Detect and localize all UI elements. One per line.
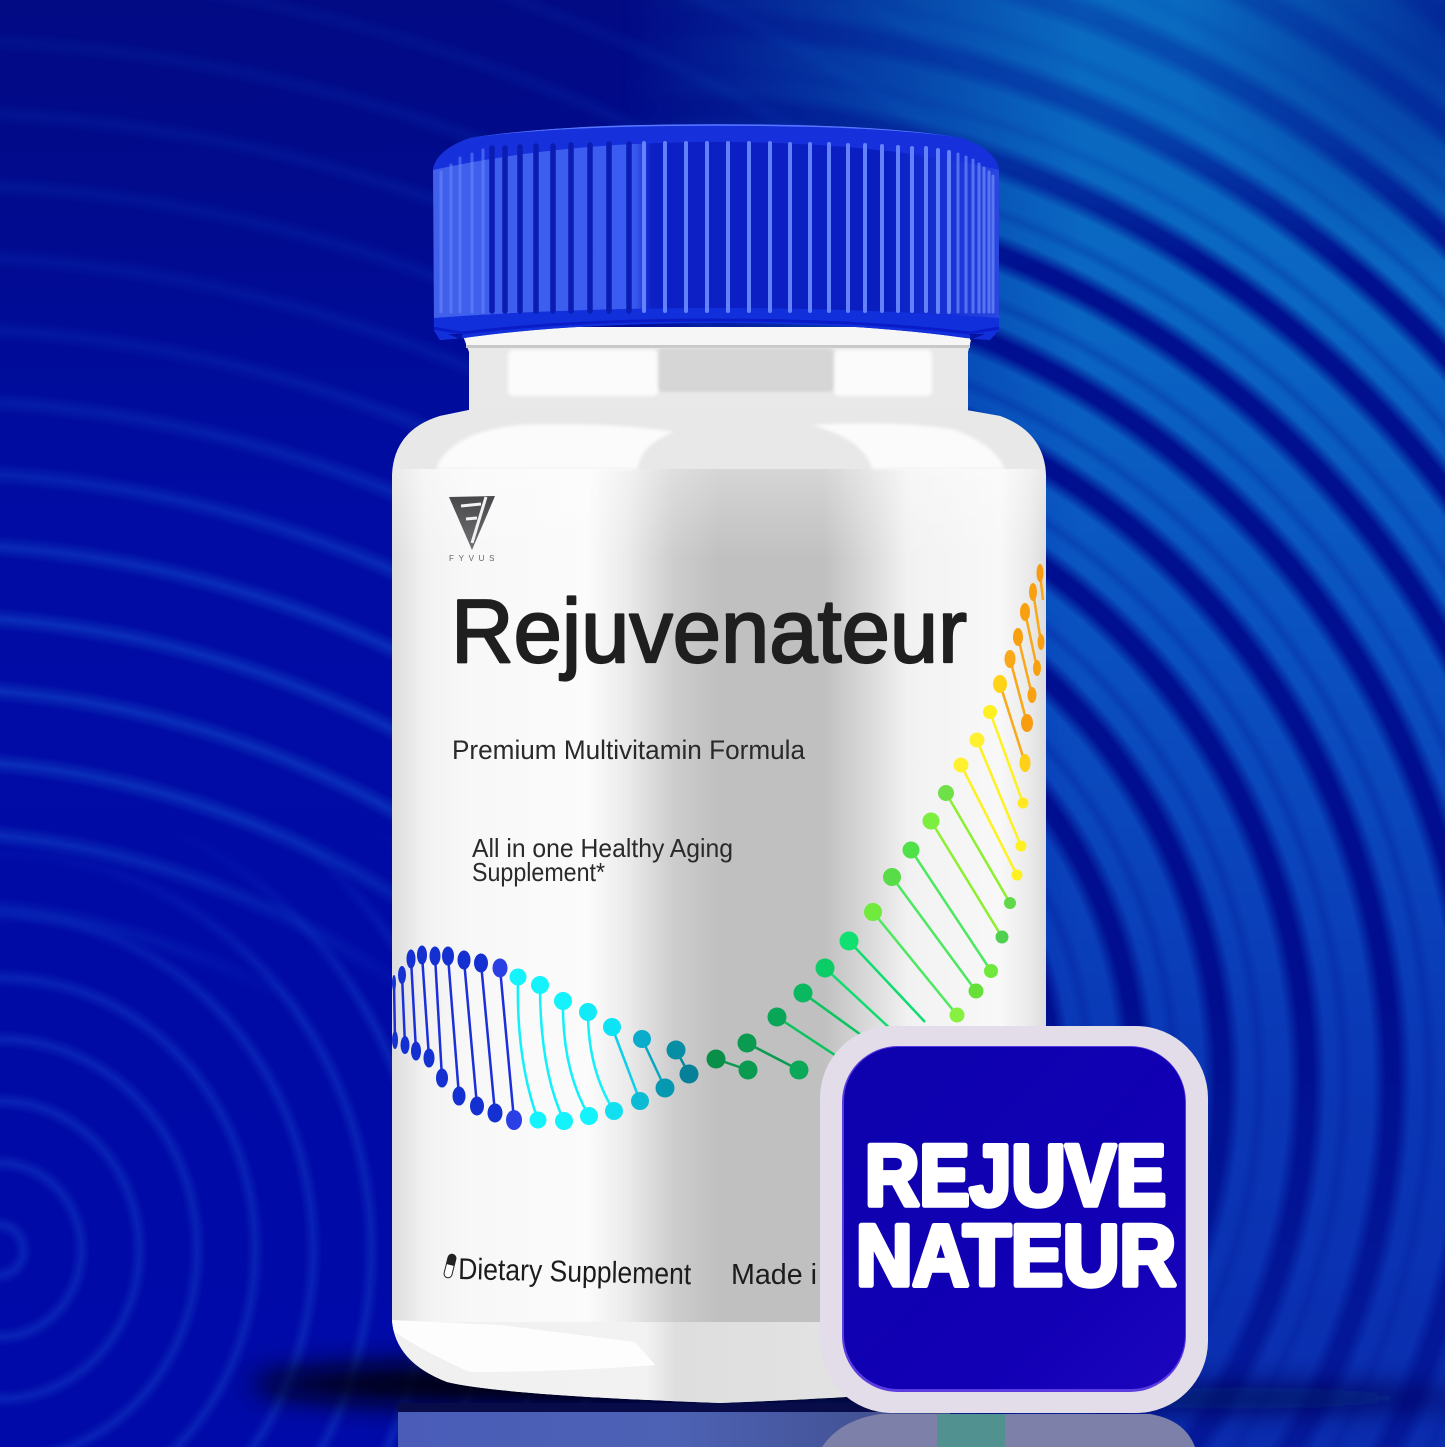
tagline [472, 833, 733, 887]
background: lighter right side with ripple arcs [660, 0, 1445, 1447]
icon: capsule [443, 1253, 457, 1279]
bottle shoulder [392, 405, 1046, 469]
brand logo: FYVUS [449, 496, 499, 563]
product name: Rejuvenateur [451, 582, 967, 682]
cap lip notches [448, 334, 985, 340]
brand logo: FYVUS: FYVUS [449, 554, 499, 563]
badge text: NATEUR [856, 1208, 1176, 1304]
product illustration [238, 124, 1445, 1447]
DNA helix: blue section [392, 946, 522, 1130]
bottle body [392, 405, 1046, 1412]
floor shadow [250, 1358, 1445, 1410]
DNA helix: cyan section [510, 968, 698, 1130]
bottle base [392, 1320, 846, 1403]
bottom label: dietary supplement: Dietary Supplement [458, 1253, 692, 1291]
subtitle: Premium Multivitamin Formula [452, 735, 806, 765]
bottle neck [463, 327, 972, 412]
tagline: Supplement* [472, 857, 605, 887]
tagline: All in one Healthy Aging [472, 833, 733, 863]
bottom label: dietary supplement: Made i [731, 1259, 817, 1291]
DNA helix: green to orange section [706, 564, 1044, 1080]
badge text: REJUVE [865, 1128, 1166, 1224]
bottom label: dietary supplement [443, 1253, 817, 1291]
background ripples: lower left ellipses [0, 892, 466, 1447]
bottle cap [430, 120, 1005, 345]
floor reflection [398, 1403, 1195, 1447]
badge text [856, 1128, 1176, 1304]
badge: REJUVE NATEUR [820, 1026, 1208, 1413]
cap ribs [441, 143, 993, 312]
background ripples: upper left arcs [0, 48, 708, 960]
